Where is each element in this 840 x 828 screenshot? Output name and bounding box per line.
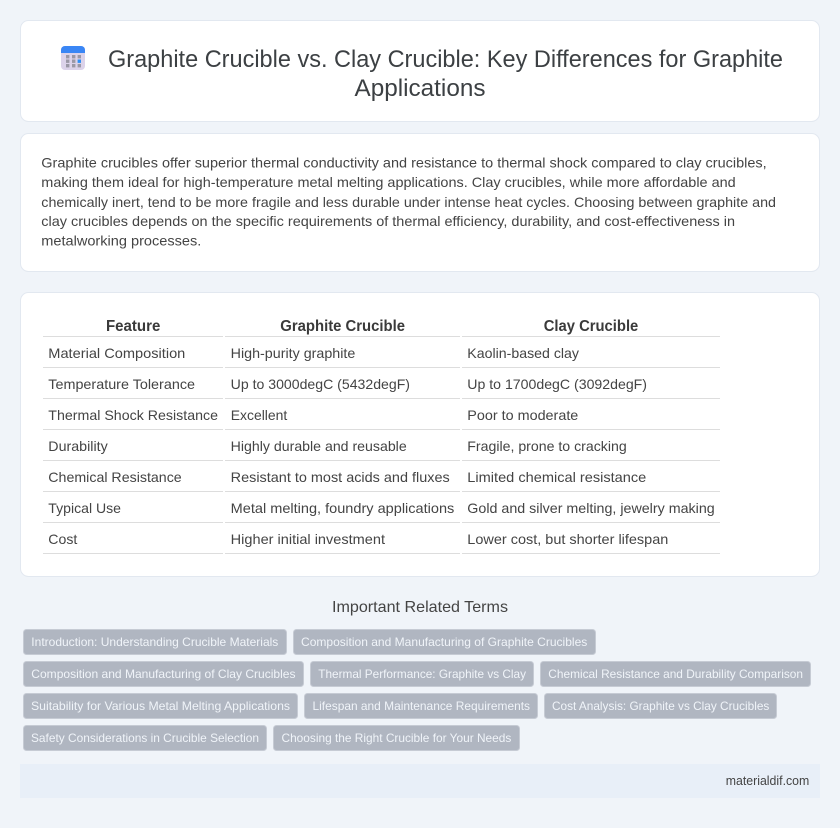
title	[108, 46, 783, 102]
panel: related term tags	[24, 630, 810, 750]
table header row: Feature	[106, 318, 160, 335]
tag	[540, 662, 810, 686]
row: chemical resistance	[48, 469, 647, 485]
tag	[310, 662, 534, 686]
row: cost: Cost	[48, 531, 77, 547]
row: material composition: Kaolin-based clay	[467, 345, 579, 361]
table header row: Clay Crucible	[544, 318, 638, 335]
tag: Introduction: Understanding Crucible Materials	[31, 635, 278, 649]
panel: header	[20, 20, 820, 122]
row: material composition	[48, 345, 579, 361]
row: material composition: High-purity graphite	[231, 345, 356, 361]
row: typical use: Typical Use	[48, 500, 121, 516]
table header row: Graphite Crucible	[280, 318, 405, 335]
row: durability: Highly durable and reusable	[231, 438, 407, 454]
tag: Composition and Manufacturing of Clay Crucibles	[31, 667, 296, 681]
text block: description: Graphite crucibles offer superior thermal conductivity and resistance to thermal shock compared to clay crucibles,	[41, 154, 767, 170]
text block: description: clay crucibles depends on the specific requirements of thermal efficiency, durability, and cost-effectiveness in	[41, 213, 735, 229]
row: thermal shock resistance: Thermal Shock Resistance	[48, 407, 218, 423]
tag: Cost Analysis: Graphite vs Clay Crucibles	[552, 699, 769, 713]
tag: Lifespan and Maintenance Requirements	[312, 699, 530, 713]
tag	[24, 726, 266, 750]
title: Graphite Crucible vs. Clay Crucible: Key Differences for Graphite	[108, 46, 783, 73]
tag	[294, 630, 596, 654]
table header row	[106, 318, 638, 335]
row: temperature tolerance	[48, 376, 647, 392]
row: chemical resistance: Resistant to most acids and fluxes	[231, 469, 450, 485]
row: typical use: Gold and silver melting, jewelry making	[467, 500, 715, 516]
row: durability	[48, 438, 627, 454]
text block: description	[41, 154, 776, 248]
panel: comparison table	[20, 292, 820, 576]
tag: Chemical Resistance and Durability Comparison	[548, 667, 803, 681]
row: chemical resistance: Chemical Resistance	[48, 469, 182, 485]
title: Applications	[354, 75, 486, 102]
row: thermal shock resistance: Poor to moderate	[467, 407, 579, 423]
row: temperature tolerance: Up to 1700degC (3092degF)	[467, 376, 647, 392]
row: typical use: Metal melting, foundry applications	[231, 500, 454, 516]
tag	[24, 662, 304, 686]
heading: important related terms: Important Related Terms	[332, 599, 508, 616]
text block: description: metalworking processes.	[41, 232, 201, 248]
text block: description: chemically inert, tend to be more fragile and less durable under intense heat cycles. Choosing between graphite and	[41, 194, 776, 210]
tag: Thermal Performance: Graphite vs Clay	[318, 667, 526, 681]
row: thermal shock resistance: Excellent	[231, 407, 287, 423]
row: cost: Higher initial investment	[231, 531, 385, 547]
tag	[24, 694, 298, 718]
tag: Composition and Manufacturing of Graphite Crucibles	[301, 635, 587, 649]
row: cost	[48, 531, 668, 547]
panel: description	[20, 134, 820, 272]
row: temperature tolerance: Up to 3000degC (5432degF)	[231, 376, 410, 392]
row: durability: Fragile, prone to cracking	[467, 438, 627, 454]
tag	[24, 630, 286, 654]
tag	[304, 694, 538, 718]
text block: description: making them ideal for high-temperature metal melting applications. Clay crucibles, while more affordable and	[41, 174, 736, 190]
icon: calendar grid	[61, 46, 85, 70]
row: chemical resistance: Limited chemical resistance	[467, 469, 647, 485]
footer: materialdif.com	[726, 773, 809, 788]
row: material composition: Material Composition	[48, 345, 185, 361]
row: durability: Durability	[48, 438, 108, 454]
row: temperature tolerance: Temperature Tolerance	[48, 376, 195, 392]
row: typical use	[48, 500, 715, 516]
row: cost: Lower cost, but shorter lifespan	[467, 531, 668, 547]
tag: Choosing the Right Crucible for Your Needs	[282, 731, 511, 745]
tag: Safety Considerations in Crucible Selection	[31, 731, 259, 745]
tag: Suitability for Various Metal Melting Applications	[31, 699, 290, 713]
tag	[544, 694, 776, 718]
row: thermal shock resistance	[48, 407, 579, 423]
tag	[274, 726, 520, 750]
footer	[20, 764, 820, 798]
